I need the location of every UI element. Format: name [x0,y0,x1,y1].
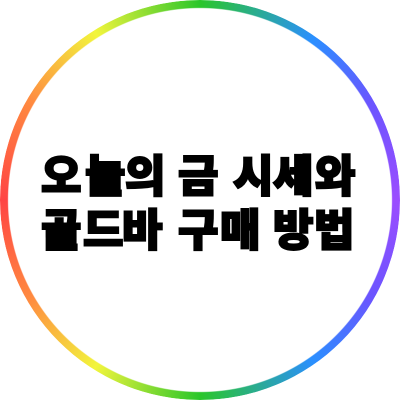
title line 2: 골드바 구매 방법 [41,206,354,256]
title line 1: 오늘의 금 시세와 [41,152,355,202]
